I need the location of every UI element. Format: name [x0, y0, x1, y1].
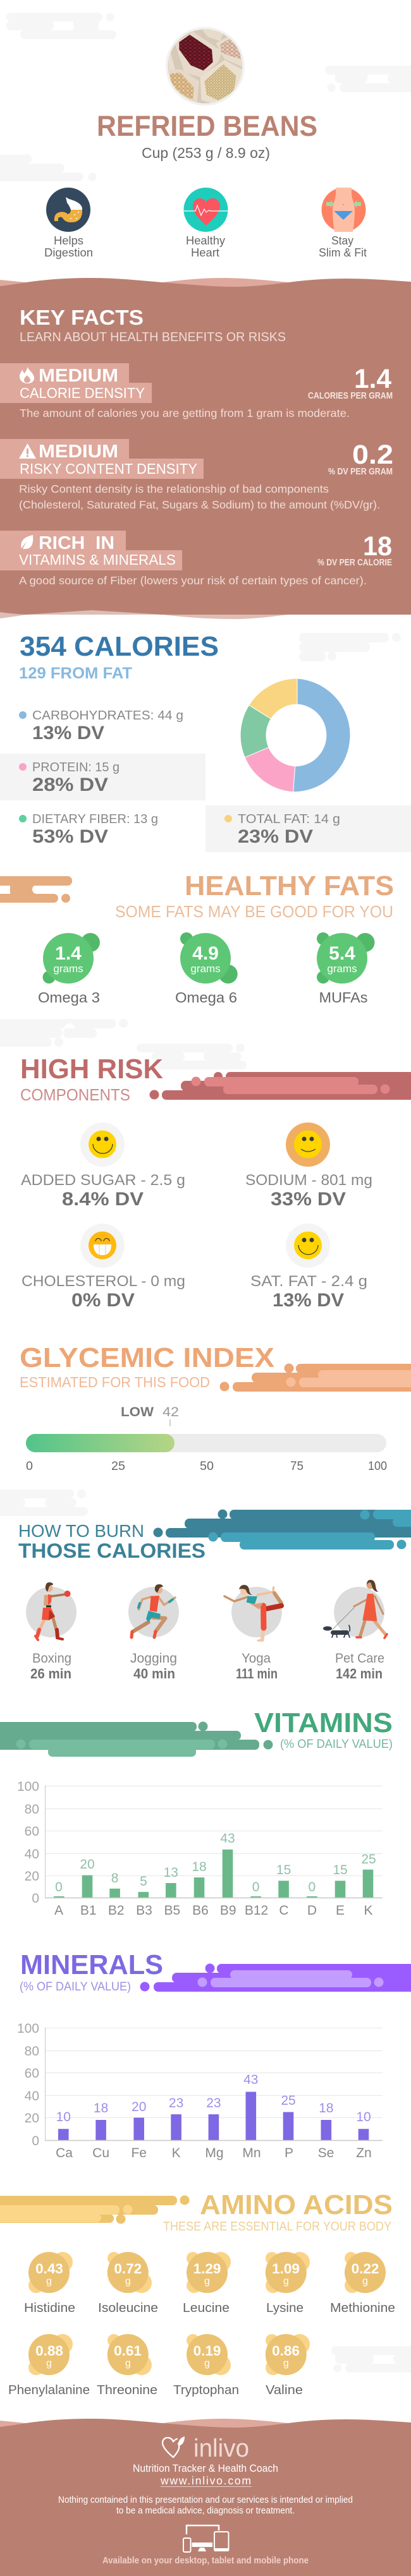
amino acid: threonine	[97, 2334, 157, 2397]
bar chart: vitamins: K	[364, 1903, 373, 1918]
rating: MEDIUM	[39, 442, 118, 462]
bar chart: minerals: K	[172, 2146, 181, 2160]
item: cholesterol: CHOLESTEROL - 0 mg	[21, 1273, 185, 1290]
duration: 26 min	[30, 1666, 71, 1682]
icon: heart	[183, 188, 228, 232]
bar chart: vitamins: D	[307, 1903, 317, 1918]
gauge value: LOW	[121, 1405, 154, 1419]
amino acid: lysine: 1.09	[272, 2261, 300, 2277]
icon: devices	[183, 2525, 229, 2552]
amino acid: methionine	[330, 2252, 395, 2315]
panel: minerals	[17, 1950, 411, 2160]
logo: inlivo	[163, 2435, 249, 2462]
bar chart: vitamins: B9	[220, 1903, 236, 1918]
bar chart: vitamins: B5	[164, 1903, 180, 1918]
fat: omega 6: 4.9	[192, 943, 219, 964]
bar chart: vitamins: 0	[309, 1880, 316, 1894]
tag	[0, 439, 204, 479]
amino acid: valine: 0.86	[272, 2343, 300, 2359]
bar chart: minerals: 100	[17, 2021, 39, 2036]
fat: omega 3	[38, 933, 100, 1006]
heading: glycemic index: GLYCEMIC INDEX	[20, 1342, 274, 1373]
legend: carbohydrates: CARBOHYDRATES: 44 g	[32, 708, 183, 723]
amino acid: lysine	[266, 2252, 310, 2315]
title: REFRIED BEANS	[97, 110, 317, 142]
amino acid: histidine	[24, 2252, 75, 2315]
exercise: boxing	[26, 1582, 77, 1682]
background cloud: above burn section	[0, 1490, 88, 1516]
bar chart: vitamins: B12	[245, 1903, 268, 1918]
decorative bars: red	[149, 1072, 411, 1100]
item: added sugar: 8.4% DV	[62, 1189, 144, 1210]
description: A good source of Fiber (lowers your risk of certain types of cancer).	[19, 574, 367, 587]
background cloud: above high risk center	[137, 1044, 247, 1069]
amino acid: threonine: Threonine	[97, 2383, 157, 2397]
item: cholesterol: 0% DV	[71, 1290, 135, 1311]
item: added sugar: ADDED SUGAR - 2.5 g	[21, 1172, 185, 1189]
bar chart: vitamins: 0	[32, 1891, 39, 1906]
website: www.inlivo.com	[160, 2474, 251, 2487]
rating: MEDIUM	[39, 366, 118, 386]
heading: high risk: HIGH RISK	[20, 1054, 164, 1085]
benefit: healthy heart	[183, 188, 228, 259]
background cloud: header right	[325, 66, 411, 92]
heading: minerals: MINERALS	[20, 1950, 163, 1980]
label	[44, 234, 93, 259]
description: (Cholesterol, Saturated Fat, Sugars & Sodium) to the amount (%DV/gr).	[19, 498, 380, 511]
background cloud: header lower left	[0, 154, 96, 181]
amino acid: tryptophan: Tryptophan	[173, 2383, 239, 2397]
label: Healthy	[186, 234, 225, 247]
bar chart: minerals: 43	[243, 2073, 258, 2087]
exercise: pet care	[323, 1580, 387, 1682]
bar chart: vitamins: 15	[276, 1863, 291, 1877]
amino acid: threonine: 0.61	[114, 2343, 142, 2359]
icon: dog walker	[323, 1580, 387, 1638]
subheading: (% OF DAILY VALUE)	[280, 1738, 393, 1751]
amino acid: valine	[266, 2334, 310, 2397]
gauge bar	[26, 1434, 386, 1452]
item: cholesterol	[21, 1224, 185, 1311]
duration: 111 min	[236, 1666, 278, 1682]
amino acid: leucine	[183, 2252, 231, 2315]
legend: protein: 28% DV	[32, 774, 108, 795]
bar chart: vitamins: 100	[17, 1779, 39, 1794]
panel: key facts	[0, 278, 411, 619]
bar chart: minerals: 0	[32, 2134, 39, 2148]
label: Jogging	[130, 1651, 177, 1666]
exercise: yoga	[224, 1585, 282, 1682]
food photo: beans	[166, 27, 244, 106]
fact: risky content density	[0, 439, 393, 511]
gauge value	[121, 1405, 179, 1426]
duration: 142 min	[336, 1666, 383, 1682]
decorative bars: yellow	[0, 2196, 190, 2224]
gauge scale	[26, 1460, 387, 1473]
decorative bars: orange	[220, 1363, 411, 1392]
icon: yoga pose	[224, 1585, 282, 1642]
legend: total fat: 23% DV	[238, 826, 313, 847]
panel: calories	[0, 632, 411, 852]
amino acid: isoleucine	[98, 2252, 158, 2315]
fat: omega 3: 1.4	[55, 943, 82, 964]
value: 0.2	[352, 440, 393, 470]
unit: CALORIES PER GRAM	[308, 391, 393, 401]
subheading: THESE ARE ESSENTIAL FOR YOUR BODY	[163, 2220, 391, 2234]
legend: carbohydrates: 13% DV	[32, 723, 104, 743]
description: The amount of calories you are getting from 1 gram is moderate.	[20, 407, 350, 419]
bar chart: minerals: 80	[25, 2044, 39, 2059]
value: 1.4	[354, 364, 391, 394]
bar chart: minerals: Mg	[205, 2146, 224, 2160]
bar chart: minerals: 60	[25, 2066, 39, 2081]
icon: stomach	[46, 188, 90, 232]
gauge value: 42	[163, 1405, 179, 1419]
amino acid: leucine: Leucine	[183, 2301, 230, 2315]
bar chart: minerals: P	[285, 2146, 293, 2160]
bar chart: vitamins: 5	[140, 1874, 147, 1889]
fat: omega 3: grams	[53, 963, 83, 975]
amino acid: methionine: 0.22	[352, 2261, 379, 2277]
unit: % DV PER GRAM	[328, 467, 393, 477]
metric name: CALORIE DENSITY	[20, 385, 145, 401]
bar chart: minerals: 10	[56, 2110, 71, 2124]
bar chart: minerals	[17, 2021, 383, 2160]
legend: dietary fiber: 53% DV	[32, 826, 108, 847]
legend: dietary fiber: DIETARY FIBER: 13 g	[32, 812, 158, 826]
panel: vitamins	[0, 1708, 393, 1918]
bar chart: vitamins: 0	[55, 1880, 63, 1894]
icon: jogger	[128, 1584, 179, 1637]
disclaimer	[58, 2495, 353, 2516]
bar chart: vitamins: B6	[192, 1903, 209, 1918]
fact: calorie density	[0, 363, 393, 419]
bar chart: minerals: 23	[206, 2096, 221, 2110]
bar chart: minerals: 10	[356, 2110, 371, 2124]
fat: omega 6	[175, 932, 238, 1006]
amino acid: phenylalanine: 0.88	[35, 2343, 63, 2359]
heading: key facts: KEY FACTS	[20, 306, 144, 329]
fat: omega 6: Omega 6	[175, 989, 237, 1006]
amino acid: histidine: Histidine	[24, 2301, 75, 2315]
amino acid: isoleucine: 0.72	[114, 2261, 142, 2277]
heading: how to burn: HOW TO BURN	[18, 1521, 144, 1541]
legend: protein	[0, 754, 206, 800]
panel: footer	[0, 2419, 411, 2576]
gauge scale: 100	[368, 1460, 387, 1473]
amino acid: tryptophan: 0.19	[193, 2343, 221, 2359]
background cloud: calories	[299, 633, 401, 661]
bar chart: minerals: Ca	[56, 2146, 73, 2160]
heading: amino acids: AMINO ACIDS	[200, 2190, 393, 2220]
fat: mufas	[317, 932, 374, 1006]
subheading: from fat: 129 FROM FAT	[19, 665, 132, 682]
bar chart: vitamins: B2	[108, 1903, 125, 1918]
description	[19, 483, 380, 511]
panel: high risk components	[20, 1054, 411, 1311]
bar chart: vitamins: 60	[25, 1824, 39, 1839]
fat: mufas: grams	[327, 963, 357, 975]
bar chart: minerals: 20	[25, 2111, 39, 2126]
amino acid: threonine: g	[125, 2358, 131, 2369]
heading: healthy fats: HEALTHY FATS	[185, 871, 394, 901]
item: added sugar	[21, 1122, 185, 1210]
panel: healthy fats	[0, 871, 394, 1006]
amino acid: lysine: g	[283, 2276, 289, 2287]
serving size: Cup (253 g / 8.9 oz)	[142, 145, 270, 161]
label	[186, 234, 225, 259]
heading: vitamins: VITAMINS	[254, 1708, 393, 1738]
label: Heart	[191, 246, 219, 259]
metric name: RISKY CONTENT DENSITY	[20, 460, 197, 477]
benefit: helps digestion	[44, 188, 93, 259]
amino acid: lysine: Lysine	[266, 2301, 304, 2315]
amino acid: tryptophan	[173, 2334, 239, 2397]
label	[319, 234, 367, 259]
decorative bars: purple	[140, 1963, 411, 1992]
tag	[0, 531, 182, 570]
bar chart: minerals: Se	[318, 2146, 334, 2160]
amino acid: leucine: g	[204, 2276, 210, 2287]
background cloud: above high risk left	[0, 1019, 128, 1047]
gauge scale: 0	[26, 1460, 33, 1473]
tagline: Nutrition Tracker & Health Coach	[133, 2462, 278, 2474]
description: Risky Content density is the relationship of bad components	[19, 483, 329, 495]
bar chart: vitamins: E	[336, 1903, 345, 1918]
background cloud: header left	[6, 13, 116, 39]
unit: % DV PER CALORIE	[317, 558, 392, 568]
bar chart: vitamins: 18	[192, 1860, 207, 1874]
fat: mufas: 5.4	[329, 943, 355, 964]
label: Helps	[54, 234, 83, 247]
panel: amino acids	[0, 2190, 411, 2397]
fat: omega 3: Omega 3	[38, 989, 100, 1006]
item: saturated fat	[250, 1224, 367, 1311]
bar chart: vitamins: B3	[136, 1903, 152, 1918]
tag	[0, 363, 152, 403]
bar chart: vitamins: 13	[164, 1865, 178, 1880]
amino acid: histidine: g	[46, 2276, 52, 2287]
disclaimer: Nothing contained in this presentation and our services is intended or implied	[58, 2495, 353, 2505]
amino acid: leucine: 1.29	[193, 2261, 221, 2277]
bar chart: minerals: Cu	[92, 2146, 109, 2160]
logo: inlivo: inlivo	[193, 2435, 249, 2462]
bar chart: minerals: 18	[94, 2101, 108, 2116]
amino acid: phenylalanine	[8, 2334, 90, 2397]
amino acid: valine: g	[283, 2358, 289, 2369]
subheading: (% OF DAILY VALUE)	[20, 1980, 131, 1994]
bar chart: vitamins: 40	[25, 1847, 39, 1862]
bar chart: vitamins: 25	[361, 1852, 376, 1867]
rating: RICH IN	[39, 533, 114, 553]
icon: warning	[19, 443, 36, 459]
bar chart: minerals: Mn	[242, 2146, 261, 2160]
fat: omega 6: grams	[190, 963, 221, 975]
bar chart: minerals: 40	[25, 2089, 39, 2104]
amino acid: tryptophan: g	[204, 2358, 210, 2369]
fact: rich in vitamins and minerals	[0, 531, 392, 587]
value: 18	[363, 531, 392, 562]
bar chart: vitamins: 43	[220, 1831, 235, 1846]
legend: total fat	[206, 805, 411, 852]
amino acid: histidine: 0.43	[35, 2261, 63, 2277]
icon: boxer	[26, 1582, 77, 1640]
decorative bars: orange	[0, 876, 72, 903]
amino acid: methionine: Methionine	[330, 2301, 395, 2315]
icon: flame	[20, 366, 34, 383]
benefit: stay slim and fit	[319, 188, 367, 259]
label: Stay	[331, 234, 353, 247]
subheading: ESTIMATED FOR THIS FOOD	[20, 1374, 210, 1390]
fat: mufas: MUFAs	[319, 989, 368, 1006]
duration: 40 min	[133, 1666, 175, 1682]
bar chart: minerals: Fe	[131, 2146, 147, 2160]
label: Pet Care	[335, 1651, 384, 1666]
amino acid: methionine: g	[362, 2276, 368, 2287]
donut chart	[240, 678, 350, 792]
bar chart: minerals: 23	[169, 2096, 183, 2110]
item: sodium: 33% DV	[271, 1189, 346, 1210]
amino acid: phenylalanine: Phenylalanine	[8, 2383, 90, 2397]
bar chart: minerals: Zn	[356, 2146, 372, 2160]
subheading: LEARN ABOUT HEALTH BENEFITS OR RISKS	[20, 330, 286, 344]
amino acid: valine: Valine	[266, 2383, 303, 2397]
bar chart: vitamins: 20	[80, 1857, 95, 1872]
bar chart: minerals: 25	[281, 2093, 296, 2108]
amino acid: isoleucine: g	[125, 2276, 131, 2287]
bar chart: minerals: 18	[319, 2101, 333, 2116]
bar chart: minerals: 20	[132, 2100, 146, 2114]
label: Yoga	[242, 1651, 271, 1666]
legend: total fat: TOTAL FAT: 14 g	[238, 812, 340, 826]
disclaimer: to be a medical advice, diagnosis or treatment.	[116, 2505, 295, 2516]
exercise: jogging	[128, 1584, 179, 1682]
decorative bars: teal	[153, 1510, 411, 1550]
item: sodium	[245, 1122, 372, 1210]
bar chart: vitamins: 15	[333, 1863, 348, 1877]
panel: glycemic index	[20, 1342, 411, 1473]
bar chart: vitamins: 80	[25, 1802, 39, 1817]
item: saturated fat: 13% DV	[273, 1290, 344, 1311]
subheading: COMPONENTS	[20, 1085, 130, 1104]
gauge scale: 75	[290, 1460, 304, 1473]
bar chart: vitamins: B1	[80, 1903, 97, 1918]
label: Boxing	[32, 1651, 71, 1666]
gauge scale: 25	[111, 1460, 125, 1473]
gauge scale: 50	[200, 1460, 214, 1473]
decorative bars: green	[0, 1722, 273, 1757]
subheading: SOME FATS MAY BE GOOD FOR YOU	[115, 902, 393, 921]
item: sodium: SODIUM - 801 mg	[245, 1172, 372, 1189]
bar chart: vitamins: 0	[252, 1880, 259, 1894]
metric name: VITAMINS & MINERALS	[19, 551, 176, 568]
icon: slim waist	[321, 188, 365, 232]
legend: dietary fiber	[19, 812, 158, 847]
background cloud: amino acids right	[331, 2346, 411, 2373]
bar chart: vitamins: 20	[25, 1869, 39, 1884]
amino acid: phenylalanine: g	[46, 2358, 52, 2369]
panel: how to burn calories	[18, 1510, 411, 1682]
label: Slim & Fit	[319, 246, 367, 259]
legend: protein: PROTEIN: 15 g	[32, 760, 120, 774]
bar chart: vitamins: C	[279, 1903, 289, 1918]
availability note: Available on your desktop, tablet and mobile phone	[102, 2556, 309, 2566]
bar chart: vitamins	[17, 1779, 383, 1918]
bar chart: vitamins: A	[54, 1903, 63, 1918]
heading: those calories: THOSE CALORIES	[18, 1539, 206, 1562]
item: saturated fat: SAT. FAT - 2.4 g	[250, 1273, 367, 1290]
bar chart: vitamins: 8	[111, 1871, 118, 1886]
label: Digestion	[44, 246, 93, 259]
heading: calories: 354 CALORIES	[20, 632, 219, 662]
legend: carbohydrates	[19, 708, 183, 743]
icon: leaf	[21, 535, 33, 549]
amino acid: isoleucine: Isoleucine	[98, 2301, 158, 2315]
